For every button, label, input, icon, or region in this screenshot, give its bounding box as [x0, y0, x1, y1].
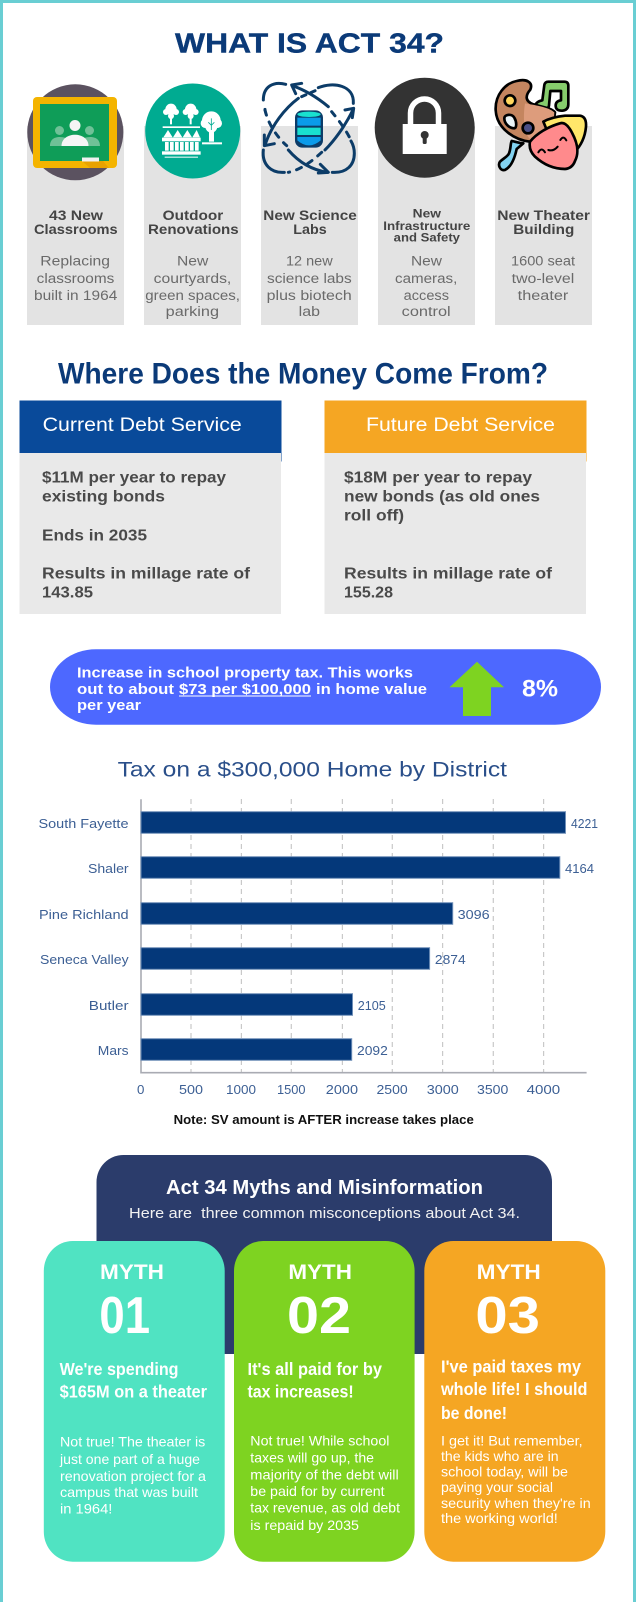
- myth statement: We're spending: [60, 1359, 178, 1379]
- myth rebuttal: tax revenue, as old debt: [250, 1500, 400, 1516]
- card heading: 43 New: [49, 208, 104, 223]
- card heading: New Science: [263, 208, 357, 223]
- myth label: MYTH: [477, 1260, 541, 1284]
- panel: myth 03: [424, 1241, 605, 1562]
- value labels: 2105: [358, 998, 386, 1013]
- panel: science labs: [261, 83, 358, 325]
- axis tick labels: 500: [179, 1082, 203, 1097]
- axis tick labels: 4000: [527, 1082, 560, 1097]
- card text: 12 new: [286, 254, 333, 269]
- myths subheading: Here are three common misconceptions about Act 34.: [129, 1205, 520, 1222]
- myth statement: be done!: [441, 1403, 507, 1423]
- myth statement: [60, 1359, 207, 1402]
- chart note: Note: SV amount is AFTER increase takes place: [174, 1113, 474, 1127]
- title: WHAT IS ACT 34?: [175, 28, 444, 59]
- card heading: [34, 208, 118, 237]
- value labels: 2092: [357, 1043, 388, 1058]
- myth statement: [248, 1359, 382, 1402]
- card heading: Building: [513, 222, 574, 237]
- callout text: out to about: [77, 682, 174, 698]
- card heading: Outdoor: [163, 208, 224, 223]
- panel text: Ends in 2035: [42, 527, 147, 544]
- panel: theater building: [495, 80, 592, 325]
- myth statement: It's all paid for by: [248, 1359, 382, 1379]
- card heading: [497, 208, 591, 237]
- panel: classrooms: [27, 84, 124, 325]
- card text: [34, 254, 118, 303]
- panel: outdoor renovations: [144, 84, 241, 325]
- panel text: 143.85: [42, 584, 93, 601]
- card text: plus biotech: [267, 288, 352, 303]
- icon: palette, music note and masks: [496, 80, 586, 170]
- myth rebuttal: the working world!: [441, 1510, 558, 1526]
- value labels: 2874: [435, 952, 466, 967]
- panel text: 155.28: [344, 584, 393, 601]
- value labels: 4164: [565, 861, 594, 876]
- card text: parking: [166, 304, 219, 319]
- card heading: New Theater: [497, 208, 591, 223]
- myth rebuttal: Not true! While school: [250, 1433, 389, 1449]
- card heading: and Safety: [394, 232, 461, 244]
- category labels: Mars: [98, 1043, 129, 1058]
- bars: [141, 812, 566, 1060]
- panel text: Results in millage rate of: [42, 565, 251, 582]
- chart title: Tax on a $300,000 Home by District: [118, 759, 507, 782]
- myth rebuttal: campus that was built: [60, 1484, 198, 1500]
- card text: [395, 254, 457, 319]
- myth rebuttal: paying your social: [441, 1479, 553, 1495]
- myth statement: $165M on a theater: [60, 1382, 207, 1402]
- value labels: 4221: [571, 816, 598, 831]
- myth statement: [440, 1356, 587, 1423]
- myth number: 02: [287, 1287, 351, 1345]
- card text: [145, 254, 240, 319]
- panel text: [344, 470, 553, 601]
- myth statement: tax increases!: [248, 1382, 354, 1402]
- myth rebuttal: [441, 1433, 591, 1526]
- myths heading: Act 34 Myths and Misinformation: [166, 1177, 483, 1199]
- card text: Replacing: [40, 254, 110, 269]
- myth rebuttal: the kids who are in: [441, 1448, 559, 1464]
- card text: control: [402, 304, 451, 319]
- axis tick labels: 1500: [277, 1082, 306, 1097]
- callout text: per year: [77, 698, 141, 714]
- myth rebuttal: in 1964!: [60, 1501, 112, 1517]
- card heading: [148, 208, 239, 237]
- category labels: Shaler: [88, 861, 129, 876]
- card text: New: [411, 254, 442, 269]
- axis tick labels: 1000: [226, 1082, 256, 1097]
- panel: myth 02: [234, 1241, 415, 1562]
- value labels: 3096: [458, 907, 490, 922]
- icon: up arrow: [450, 662, 504, 716]
- axis tick labels: 2000: [326, 1082, 358, 1097]
- card heading: Labs: [293, 222, 327, 237]
- myth number: 01: [99, 1287, 150, 1345]
- myth rebuttal: school today, will be: [441, 1464, 568, 1480]
- category labels: Pine Richland: [39, 907, 129, 922]
- myth label: MYTH: [288, 1260, 352, 1284]
- panel: myth 01: [44, 1241, 225, 1562]
- callout text: Increase in school property tax. This works: [77, 665, 413, 681]
- panel text: $18M per year to repay: [344, 470, 532, 487]
- myth rebuttal: is repaid by 2035: [250, 1517, 359, 1533]
- myth statement: I've paid taxes my: [441, 1356, 581, 1376]
- axis tick labels: 3000: [427, 1082, 459, 1097]
- axis tick labels: 2500: [376, 1082, 408, 1097]
- myth rebuttal: majority of the debt will: [250, 1467, 399, 1483]
- card text: theater: [518, 288, 569, 303]
- panel text: Results in millage rate of: [344, 565, 553, 582]
- percent value: 8%: [522, 676, 558, 703]
- myth rebuttal: Not true! The theater is: [60, 1434, 205, 1450]
- icon: padlock: [375, 78, 475, 178]
- card heading: New: [413, 208, 441, 220]
- card text: [511, 254, 575, 303]
- callout: tax increase: [50, 649, 601, 725]
- panel: infrastructure and safety: [375, 78, 475, 325]
- myth number: 03: [475, 1287, 540, 1345]
- panel: myths header: [96, 1155, 552, 1354]
- panel heading: Current Debt Service: [43, 415, 242, 436]
- myth label: MYTH: [100, 1260, 164, 1284]
- category labels: Butler: [89, 998, 129, 1013]
- card text: science labs: [267, 271, 352, 286]
- myth rebuttal: be paid for by current: [250, 1483, 385, 1499]
- panel text: [42, 470, 251, 601]
- myth rebuttal: renovation project for a: [60, 1468, 206, 1484]
- value labels: [357, 816, 598, 1058]
- bar chart: tax by district: [38, 799, 598, 1097]
- myth statement: whole life! I should: [440, 1379, 587, 1399]
- card heading: Classrooms: [34, 222, 118, 237]
- myth rebuttal: security when they're in: [441, 1495, 591, 1511]
- panel text: existing bonds: [42, 488, 165, 505]
- icon: classroom chalkboard: [27, 84, 123, 180]
- card text: cameras,: [395, 271, 457, 286]
- card text: courtyards,: [154, 271, 231, 286]
- myth rebuttal: taxes will go up, the: [250, 1450, 374, 1466]
- myth rebuttal: I get it! But remember,: [441, 1433, 583, 1449]
- card text: green spaces,: [145, 288, 240, 303]
- myth rebuttal: [59, 1434, 206, 1517]
- card text: access: [404, 288, 449, 303]
- callout text: in home value: [316, 682, 427, 698]
- category labels: [38, 816, 129, 1058]
- callout text: [77, 665, 427, 714]
- card text: New: [177, 254, 209, 269]
- icon: data orbit: [263, 83, 354, 173]
- panel text: $11M per year to repay: [42, 470, 226, 487]
- axis tick labels: 3500: [477, 1082, 508, 1097]
- panel text: new bonds (as old ones: [344, 488, 540, 505]
- axis tick labels: 0: [137, 1082, 144, 1097]
- card heading: Renovations: [148, 222, 239, 237]
- card text: 1600 seat: [511, 254, 575, 269]
- panel heading: Future Debt Service: [366, 415, 555, 436]
- card text: built in 1964: [34, 288, 118, 303]
- category labels: Seneca Valley: [40, 952, 129, 967]
- panel text: roll off): [344, 507, 404, 524]
- card heading: Infrastructure: [383, 221, 470, 233]
- heading: money: Where Does the Money Come From?: [58, 357, 548, 390]
- card heading: [263, 208, 357, 237]
- card text: [267, 254, 352, 319]
- card text: two-level: [512, 271, 574, 286]
- myth rebuttal: just one part of a huge: [59, 1451, 200, 1467]
- panel: future debt service: [324, 400, 586, 614]
- category labels: South Fayette: [38, 816, 128, 831]
- panel: current debt service: [20, 400, 282, 614]
- card text: lab: [299, 304, 320, 319]
- callout text: $73 per $100,000: [179, 682, 311, 698]
- axis tick labels: [137, 1082, 560, 1097]
- icon: garden fence and trees: [145, 84, 240, 178]
- card heading: [383, 208, 470, 244]
- myth rebuttal: [250, 1433, 400, 1533]
- card text: classrooms: [37, 271, 115, 286]
